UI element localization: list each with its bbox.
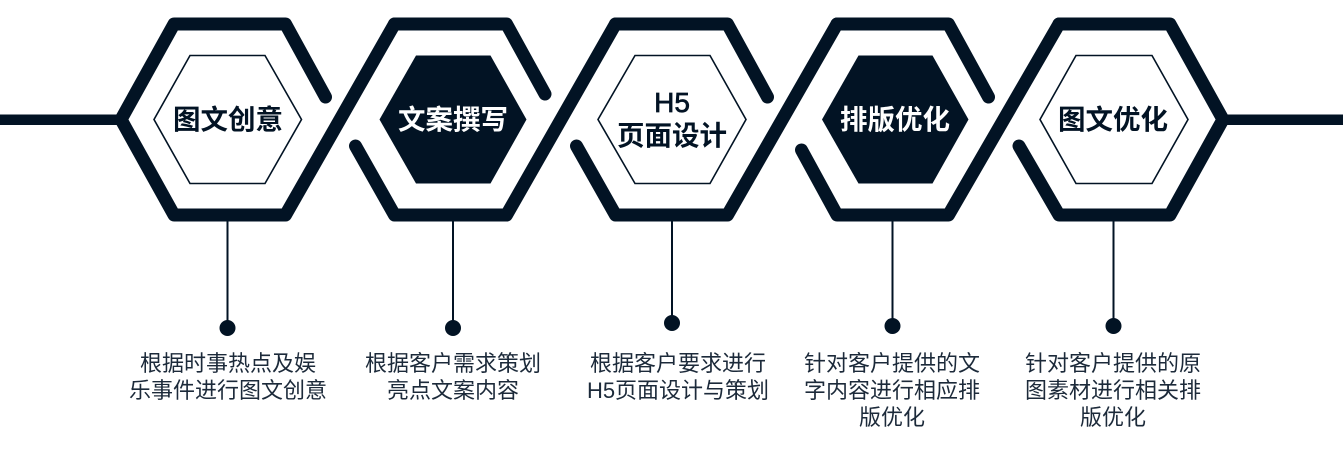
description 2: 亮点文案内容	[387, 378, 519, 403]
outer hexagon outline 3	[576, 24, 837, 215]
inner filled hexagon 2	[380, 56, 526, 184]
description 2: 根据客户需求策划	[365, 351, 541, 376]
heading 4: 排版优化	[840, 104, 950, 135]
connector 1	[226, 221, 228, 328]
description 1: 乐事件进行图文创意	[129, 378, 327, 403]
connector 3	[671, 221, 673, 323]
inner hexagon 1	[154, 56, 302, 184]
heading 1: 图文创意	[173, 104, 283, 135]
description 4: 字内容进行相应排	[804, 378, 980, 403]
inner filled hexagon 4	[822, 56, 968, 184]
description 3: H5页面设计与策划	[587, 378, 769, 403]
description 1: 根据时事热点及娱	[140, 351, 316, 376]
heading 5: 图文优化	[1058, 104, 1168, 135]
connector 5	[1112, 221, 1114, 326]
heading 3: H5	[654, 87, 690, 118]
description 5: 针对客户提供的原	[1025, 351, 1201, 376]
dot 5	[1106, 318, 1122, 334]
description 3: 根据客户要求进行	[590, 351, 766, 376]
step 4: 排版优化	[802, 24, 1059, 430]
connector 4	[892, 221, 894, 326]
description 4: 针对客户提供的文	[804, 351, 980, 376]
dot 1	[220, 320, 236, 336]
description 4: 版优化	[859, 405, 925, 430]
step 2: 文案撰写	[356, 24, 616, 403]
outer hexagon outline 1	[121, 24, 394, 215]
step 3: H5页面设计	[576, 24, 837, 403]
left axis line	[0, 114, 118, 125]
connector 2	[452, 221, 454, 328]
heading 2: 文案撰写	[398, 104, 508, 135]
heading 3: 页面设计	[617, 120, 727, 151]
inner hexagon 3	[598, 56, 746, 184]
right axis line	[1226, 114, 1343, 125]
dot 2	[445, 320, 461, 336]
description 5: 图素材进行相关排	[1025, 378, 1201, 403]
description 5: 版优化	[1080, 405, 1146, 430]
outer hexagon outline 5	[1019, 24, 1223, 215]
dot 4	[884, 318, 900, 334]
step 5: 图文优化	[1019, 24, 1223, 430]
inner hexagon 5	[1040, 56, 1188, 184]
step 1: 图文创意	[121, 24, 394, 403]
dot 3	[664, 315, 680, 331]
outer hexagon outline 4	[802, 24, 1059, 215]
outer hexagon outline 2	[356, 24, 616, 215]
